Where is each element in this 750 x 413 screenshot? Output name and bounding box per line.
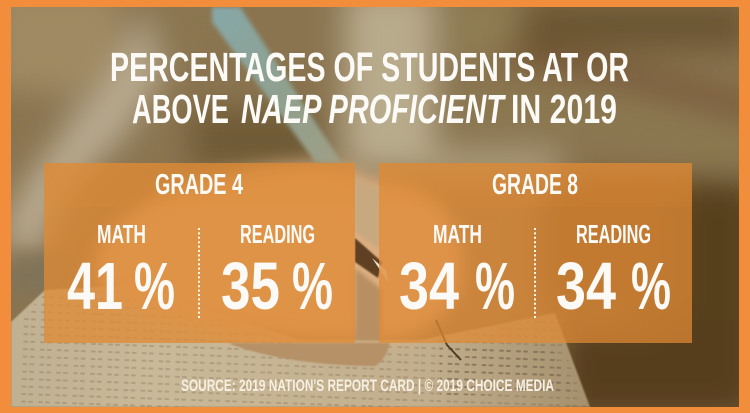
pencil	[212, 7, 461, 360]
label: reading: READING	[240, 219, 315, 249]
value: math 41%	[67, 249, 175, 324]
value: reading 35%: 35	[221, 249, 280, 324]
title: NAEP PROFICIENT	[241, 86, 506, 132]
dotted divider	[534, 228, 536, 320]
value: reading 34%	[556, 249, 671, 324]
value: reading 34%: 34	[556, 249, 616, 324]
panel: grade 4	[44, 163, 355, 343]
grade 8 header band	[379, 163, 692, 207]
title: ABOVE	[132, 86, 229, 132]
left dark fold beside hand	[12, 249, 44, 288]
grade 4 header band	[44, 163, 355, 207]
value: math 34%	[399, 249, 515, 324]
value: math 41%: 41	[67, 249, 123, 324]
dotted divider	[198, 228, 200, 320]
title	[110, 44, 629, 132]
label: reading: READING	[576, 219, 651, 249]
panel: grade 8	[379, 163, 692, 343]
label: math: MATH	[97, 219, 146, 249]
title: IN 2019	[511, 86, 617, 132]
source line: SOURCE: 2019 NATION'S REPORT CARD | © 2019 CHOICE MEDIA	[181, 376, 554, 395]
value: math 34%: 34	[399, 249, 459, 324]
value: reading 35%: %	[292, 249, 333, 324]
value: math 41%: %	[134, 249, 175, 324]
value: math 34%: %	[475, 249, 515, 324]
heading: grade 4: GRADE 4	[155, 169, 243, 201]
value: reading 34%: %	[631, 249, 671, 324]
heading: grade 8: GRADE 8	[492, 169, 578, 201]
hand	[94, 164, 463, 366]
label: math: MATH	[433, 219, 482, 249]
answer sheet	[11, 285, 590, 407]
value: reading 35%	[221, 249, 333, 324]
